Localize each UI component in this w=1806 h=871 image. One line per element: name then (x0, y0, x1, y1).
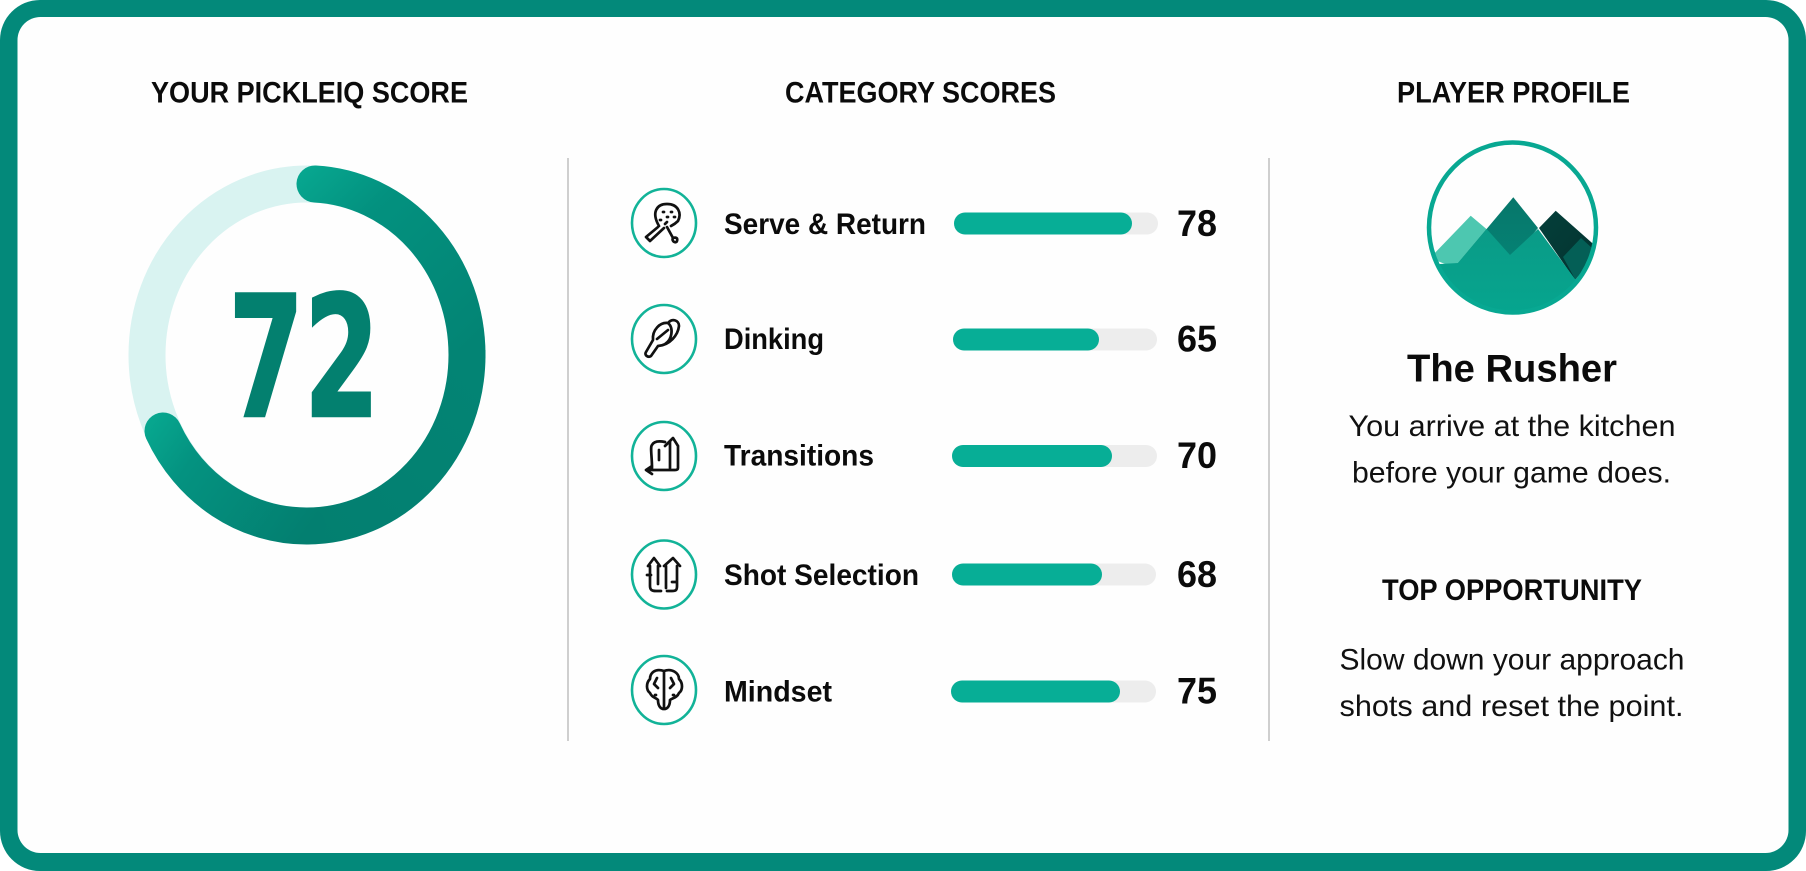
heading: top opportunity: TOP OPPORTUNITY (1382, 574, 1642, 607)
label: Transitions (724, 440, 874, 472)
bar (952, 445, 1157, 467)
row: transitions (632, 422, 1217, 490)
icon: court arrows (632, 422, 696, 490)
icon: paddle (632, 305, 696, 373)
icon: brain (632, 656, 696, 724)
profile description: before your game does. (1352, 456, 1671, 490)
value: 65 (1177, 318, 1217, 360)
icon: paddle and ball (632, 189, 696, 257)
icon: mountain badge (1420, 142, 1600, 320)
opportunity text (1340, 644, 1684, 723)
bar (953, 328, 1157, 350)
profile description: You arrive at the kitchen (1348, 410, 1676, 443)
label: Dinking (724, 323, 824, 356)
ring track (147, 184, 467, 526)
icon: two arrows (632, 540, 696, 608)
bar (951, 680, 1156, 702)
bar (954, 212, 1158, 234)
profile name: The Rusher (1407, 348, 1617, 390)
row: shot selection (632, 540, 1217, 608)
label: Serve & Return (724, 208, 926, 241)
value: 68 (1177, 554, 1217, 595)
bar (952, 564, 1156, 586)
row: serve and return (632, 189, 1217, 257)
score number: 72 (228, 260, 380, 456)
row: mindset (632, 656, 1217, 724)
value: 78 (1177, 203, 1217, 244)
opportunity text: shots and reset the point. (1340, 690, 1684, 723)
divider right (1268, 158, 1270, 741)
row: dinking (632, 305, 1217, 373)
heading: category scores: CATEGORY SCORES (785, 76, 1056, 110)
ring progress (163, 184, 467, 526)
label: Shot Selection (724, 559, 919, 592)
profile description (1348, 410, 1676, 490)
value: 70 (1177, 435, 1217, 476)
label: Mindset (724, 676, 832, 708)
heading: player profile: PLAYER PROFILE (1397, 76, 1630, 110)
value: 75 (1177, 670, 1217, 712)
divider left (567, 158, 569, 741)
heading: your pickleiq score: YOUR PICKLEIQ SCORE (151, 76, 468, 110)
opportunity text: Slow down your approach (1340, 644, 1684, 676)
score ring (147, 184, 467, 526)
